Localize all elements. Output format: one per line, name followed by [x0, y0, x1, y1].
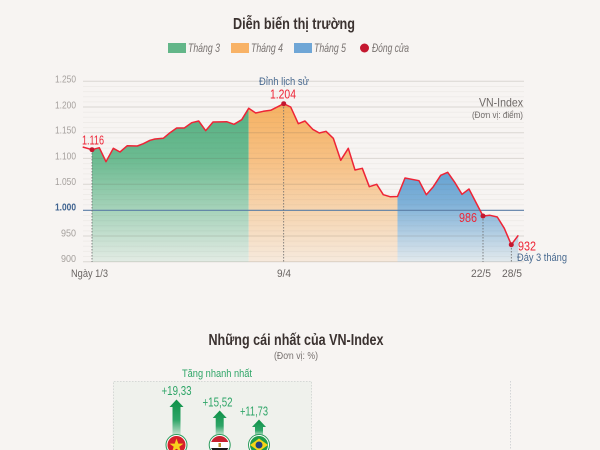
- area: May: [398, 172, 518, 262]
- y axis labels: 950: [61, 228, 76, 240]
- legend: Tháng 3: [188, 41, 220, 55]
- value labels: [82, 86, 536, 254]
- area chart: VN-Index: [83, 81, 524, 262]
- section title: VN-Index firsts: Những cái nhất của VN-Index: [208, 332, 384, 349]
- panel: fastest growth: [113, 381, 312, 450]
- bar: Egypt: [202, 394, 232, 450]
- value labels: 1.204: [270, 86, 296, 102]
- legend: Tháng 4: [251, 41, 283, 55]
- y axis labels: 1.050: [55, 176, 76, 188]
- x axis labels: 9/4: [277, 268, 291, 280]
- annotation: 3-month low: Đáy 3 tháng: [517, 252, 567, 264]
- y axis labels: [55, 74, 76, 265]
- bar: Brazil: [240, 404, 270, 450]
- x axis labels: [71, 268, 522, 280]
- y axis labels: 1.000: [55, 202, 76, 214]
- major grid lines: [83, 81, 524, 262]
- index line: [83, 104, 518, 245]
- x axis labels: Ngày 1/3: [71, 268, 108, 280]
- legend: Tháng 5: [314, 41, 346, 55]
- unit note: (Đơn vị: %): [274, 351, 318, 362]
- reference line 1000: [83, 209, 524, 211]
- bar: Brazil: +11,73: [240, 404, 268, 418]
- area: April: [249, 104, 398, 262]
- x axis labels: 22/5: [471, 268, 491, 280]
- panel: second column: [510, 381, 512, 450]
- annotation: all-time high: Đỉnh lịch sử: [259, 76, 310, 88]
- heading: fastest growth: Tăng nhanh nhất: [182, 368, 252, 380]
- bar: Vietnam: [162, 383, 192, 450]
- value labels: 986: [459, 210, 477, 225]
- area: March: [92, 108, 249, 262]
- y axis labels: 1.200: [55, 100, 76, 112]
- value labels: 932: [518, 238, 536, 254]
- value labels: 1.116: [82, 132, 104, 148]
- bar: Vietnam: +19,33: [162, 383, 192, 398]
- series label: VN-Index: [472, 96, 523, 121]
- y axis labels: 1.100: [55, 150, 76, 162]
- y axis labels: 1.150: [55, 124, 76, 136]
- y axis labels: 900: [61, 253, 76, 265]
- dotted date markers: [92, 104, 511, 262]
- legend: Đóng cửa: [372, 41, 409, 55]
- title: market movement: Diễn biến thị trường: [233, 14, 355, 33]
- x axis labels: 28/5: [502, 268, 522, 280]
- bar: Egypt: +15,52: [202, 394, 232, 410]
- closing points: [90, 101, 514, 247]
- series label: VN-Index: (Đơn vị: điểm): [472, 110, 523, 121]
- y axis labels: 1.250: [55, 74, 76, 86]
- series label: VN-Index: VN-Index: [479, 96, 523, 110]
- legend: [168, 41, 409, 55]
